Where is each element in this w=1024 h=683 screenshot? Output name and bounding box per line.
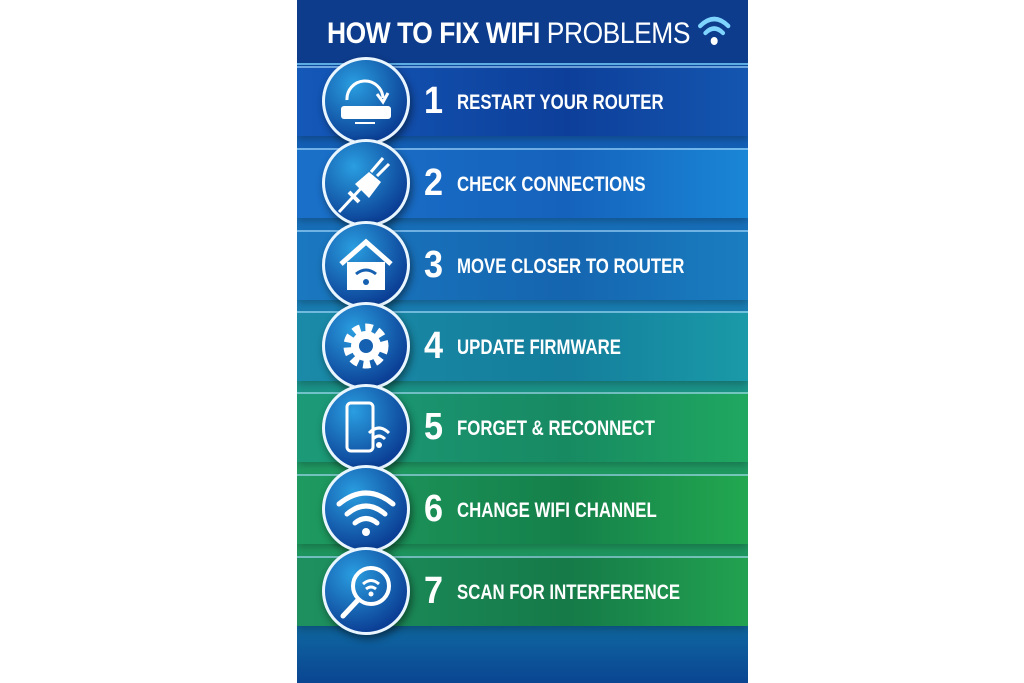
step 2: CHECK CONNECTIONS	[457, 173, 646, 196]
step 7: SCAN FOR INTERFERENCE	[457, 581, 680, 604]
step 5: 5	[424, 406, 443, 448]
step 3: 3	[424, 244, 443, 286]
step 4: UPDATE FIRMWARE	[457, 336, 621, 359]
icon: plug	[322, 139, 410, 227]
icon: wifi	[322, 465, 410, 553]
step 4	[297, 311, 748, 381]
icon: magnifier wifi	[322, 547, 410, 635]
step 2	[297, 148, 748, 218]
icon: router restart	[322, 57, 410, 145]
step 3	[297, 230, 748, 300]
step 5	[297, 392, 748, 462]
panel: infographic	[297, 0, 748, 683]
step 3: MOVE CLOSER TO ROUTER	[457, 255, 684, 278]
step 7: 7	[424, 570, 443, 612]
title	[297, 0, 748, 65]
step 6: 6	[424, 488, 443, 530]
icon: home wifi	[322, 221, 410, 309]
step 5: FORGET & RECONNECT	[457, 417, 655, 440]
step 6: CHANGE WIFI CHANNEL	[457, 499, 657, 522]
step 7	[297, 556, 748, 626]
step 4: 4	[424, 325, 443, 367]
icon: phone wifi	[322, 384, 410, 472]
step 1: 1	[424, 80, 443, 122]
step 2: 2	[424, 162, 443, 204]
icon: gear	[322, 302, 410, 390]
step 6	[297, 474, 748, 544]
step 1: RESTART YOUR ROUTER	[457, 91, 664, 114]
title: HOW TO FIX WIFI PROBLEMS	[327, 17, 690, 50]
step 1	[297, 66, 748, 136]
